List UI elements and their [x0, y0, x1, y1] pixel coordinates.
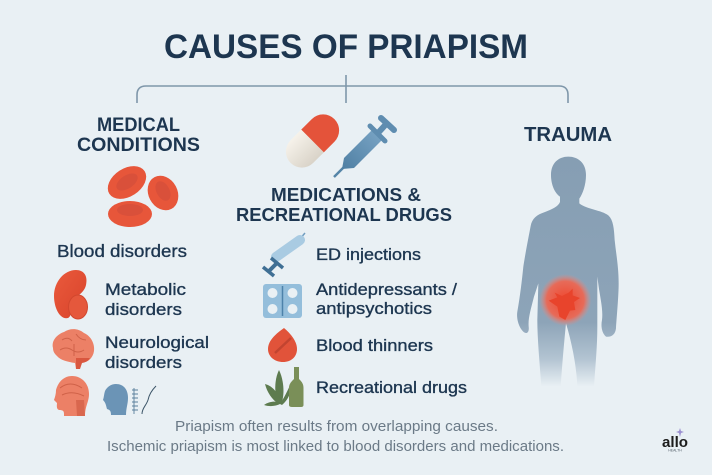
logo: allo health: allo: [662, 434, 688, 451]
footer note: Priapism often results from overlapping causes.: [175, 419, 498, 435]
footer note: Ischemic priapism is most linked to blood disorders and medications.: [107, 439, 564, 455]
logo: allo health: HEALTH: [668, 448, 682, 452]
logo: allo health: [662, 428, 688, 452]
panel: medications and recreational drugs: [236, 108, 467, 407]
icon: kidney: [54, 270, 88, 319]
title: CAUSES OF PRIAPISM: [164, 28, 528, 66]
text: metabolic disorders: disorders: [105, 300, 182, 319]
text: neurological disorders: Neurological: [105, 333, 209, 352]
icon: brain: [53, 329, 94, 369]
panel: trauma: [517, 124, 619, 387]
text: blood disorders: Blood disorders: [57, 241, 187, 261]
heading: trauma: TRAUMA: [524, 124, 612, 146]
icon: blood drop pill: [268, 328, 297, 362]
icon: blister pack: [263, 284, 302, 318]
icon: ED syringe: [263, 233, 305, 276]
icon: red blood cells: [102, 159, 184, 227]
icon: human body with groin injury: [517, 157, 619, 387]
text: ED injections: ED injections: [316, 245, 421, 264]
icon: cannabis leaf and bottle: [264, 367, 304, 407]
text: neurological disorders: disorders: [105, 353, 182, 372]
text: recreational drugs: Recreational drugs: [316, 378, 467, 397]
icon: syringe: [334, 118, 394, 177]
heading: medical conditions: CONDITIONS: [77, 135, 200, 156]
icon: blue head and spine: [103, 384, 156, 415]
panel: medical conditions: [53, 115, 209, 416]
icon: capsule: [279, 108, 346, 174]
heading: medical conditions: MEDICAL: [97, 115, 180, 136]
heading: medications and recreational drugs: MEDICATIONS &: [271, 184, 421, 205]
text: antidepressants / antipsychotics: antipsychotics: [316, 299, 432, 318]
icon: head with brain: [54, 376, 89, 416]
text: metabolic disorders: Metabolic: [105, 280, 187, 299]
text: blood thinners: Blood thinners: [316, 336, 433, 355]
text: antidepressants / antipsychotics: Antidepressants /: [316, 280, 457, 299]
heading: medications and recreational drugs: RECREATIONAL DRUGS: [236, 204, 452, 225]
bracket connector: [137, 75, 568, 103]
